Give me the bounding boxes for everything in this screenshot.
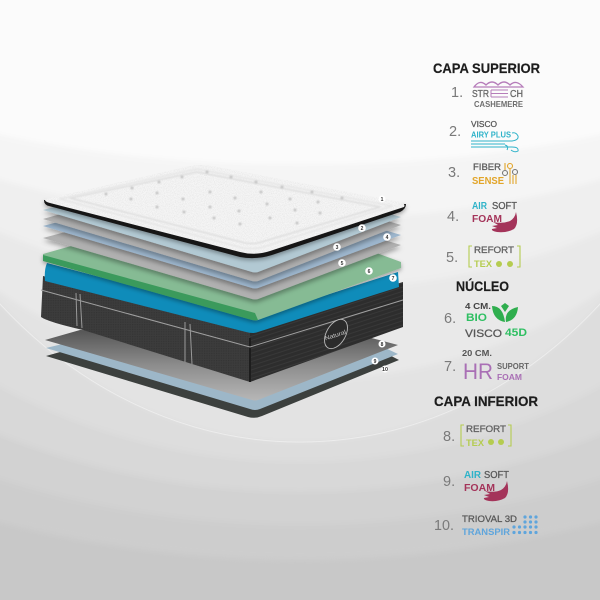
item 2: visco airy plus: AIRY PLUS xyxy=(471,130,511,140)
item 9: air soft foam: FOAM xyxy=(464,483,495,494)
layer 3: grey fabric xyxy=(43,195,401,282)
layer number tags: 10 xyxy=(382,367,388,373)
item 8: refort tex: REFORT xyxy=(466,424,506,435)
icon: wind xyxy=(471,133,518,152)
icon: feather xyxy=(484,481,508,501)
item 4: air soft foam: FOAM xyxy=(472,214,502,225)
icon: feather xyxy=(492,212,517,232)
icon: fibers xyxy=(502,163,518,184)
item 9: air soft foam: AIR xyxy=(464,470,482,481)
layer number tags: 7 xyxy=(392,276,395,282)
layer 8: grey fabric xyxy=(45,330,398,400)
item 8: refort tex xyxy=(443,424,511,449)
item 1: strech cashemere xyxy=(451,82,523,109)
item 4: air soft foam: SOFT xyxy=(492,201,517,212)
layer number tags: 1 xyxy=(381,197,384,203)
item 5: refort tex: 5. xyxy=(446,250,458,266)
item 9: air soft foam: SOFT xyxy=(484,470,509,481)
item 1: strech cashemere: CASHEMERE xyxy=(474,99,523,109)
heading: capa inferior: CAPA INFERIOR xyxy=(434,393,538,409)
item 3: fiber sense: 3. xyxy=(448,165,460,181)
layer 7: blue foam xyxy=(45,263,399,333)
item 6: bio visco 45d: 45D xyxy=(505,327,527,339)
layer 2: blue foam xyxy=(43,188,401,272)
layer number tags xyxy=(333,196,397,373)
item 10: trioval 3d transpir: TRANSPIR xyxy=(462,527,510,538)
item 1: strech cashemere: CH xyxy=(510,88,523,100)
layer 6: green foam xyxy=(43,225,401,320)
item 6: bio visco 45d: 4 CM. xyxy=(465,301,491,311)
item 4: air soft foam: 4. xyxy=(447,209,459,225)
layer number tags: 2 xyxy=(361,226,364,232)
item 5: refort tex: REFORT xyxy=(474,245,514,256)
item 1: strech cashemere: STR xyxy=(472,88,489,100)
item 7: hr suport foam: 7. xyxy=(444,359,456,375)
layer 4: blue foam xyxy=(43,205,401,288)
item 7: hr suport foam xyxy=(444,348,529,384)
item 2: visco airy plus: VISCO xyxy=(471,119,497,129)
item 5: refort tex: TEX xyxy=(474,259,493,270)
icon: leaves xyxy=(492,303,518,322)
item 7: hr suport foam: SUPORT xyxy=(497,362,529,371)
item 1: strech cashemere: 1. xyxy=(451,85,463,101)
item 4: air soft foam: AIR xyxy=(472,201,488,212)
item 4: air soft foam xyxy=(447,201,517,232)
item 3: fiber sense: SENSE xyxy=(472,176,504,187)
item 2: visco airy plus xyxy=(449,119,518,152)
item 9: air soft foam xyxy=(443,470,509,501)
layer 10: dark base fabric xyxy=(46,335,399,418)
layer number tags: 9 xyxy=(374,359,377,365)
layer number tags: 5 xyxy=(341,261,344,267)
layer number tags: 4 xyxy=(386,235,389,241)
layer number tags: 8 xyxy=(381,342,384,348)
layer 5: grey fabric xyxy=(43,215,401,300)
item 10: trioval 3d transpir: TRIOVAL 3D xyxy=(462,514,517,525)
item 6: bio visco 45d: VISCO xyxy=(465,328,502,340)
item 2: visco airy plus: 2. xyxy=(449,124,461,140)
item 8: refort tex: 8. xyxy=(443,429,455,445)
layer 9: blue foam xyxy=(46,330,398,410)
item 3: fiber sense: FIBER xyxy=(473,162,501,173)
item 3: fiber sense xyxy=(448,162,518,187)
layer number tags: 6 xyxy=(368,269,371,275)
item 7: hr suport foam: HR xyxy=(463,359,493,384)
layer 1: quilted top xyxy=(44,165,406,258)
item 7: hr suport foam: FOAM xyxy=(497,373,522,382)
item 10: trioval 3d transpir xyxy=(434,514,541,538)
heading: capa superior: CAPA SUPERIOR xyxy=(433,60,540,76)
layer number tags: 3 xyxy=(336,245,339,251)
mattress core block xyxy=(41,276,403,382)
heading: nucleo: NÚCLEO xyxy=(456,277,509,294)
item 8: refort tex: TEX xyxy=(466,438,485,449)
item 7: hr suport foam: 20 CM. xyxy=(462,348,492,358)
item 6: bio visco 45d: 6. xyxy=(444,311,456,327)
exploded mattress diagram xyxy=(41,165,406,418)
logo xyxy=(320,315,352,353)
item 9: air soft foam: 9. xyxy=(443,474,455,490)
icon: dot grid xyxy=(514,517,541,532)
item 6: bio visco 45d xyxy=(444,301,527,340)
item 5: refort tex xyxy=(446,245,520,270)
logo: Natural xyxy=(324,330,347,342)
item 10: trioval 3d transpir: 10. xyxy=(434,518,454,534)
item 6: bio visco 45d: BIO xyxy=(466,312,487,324)
